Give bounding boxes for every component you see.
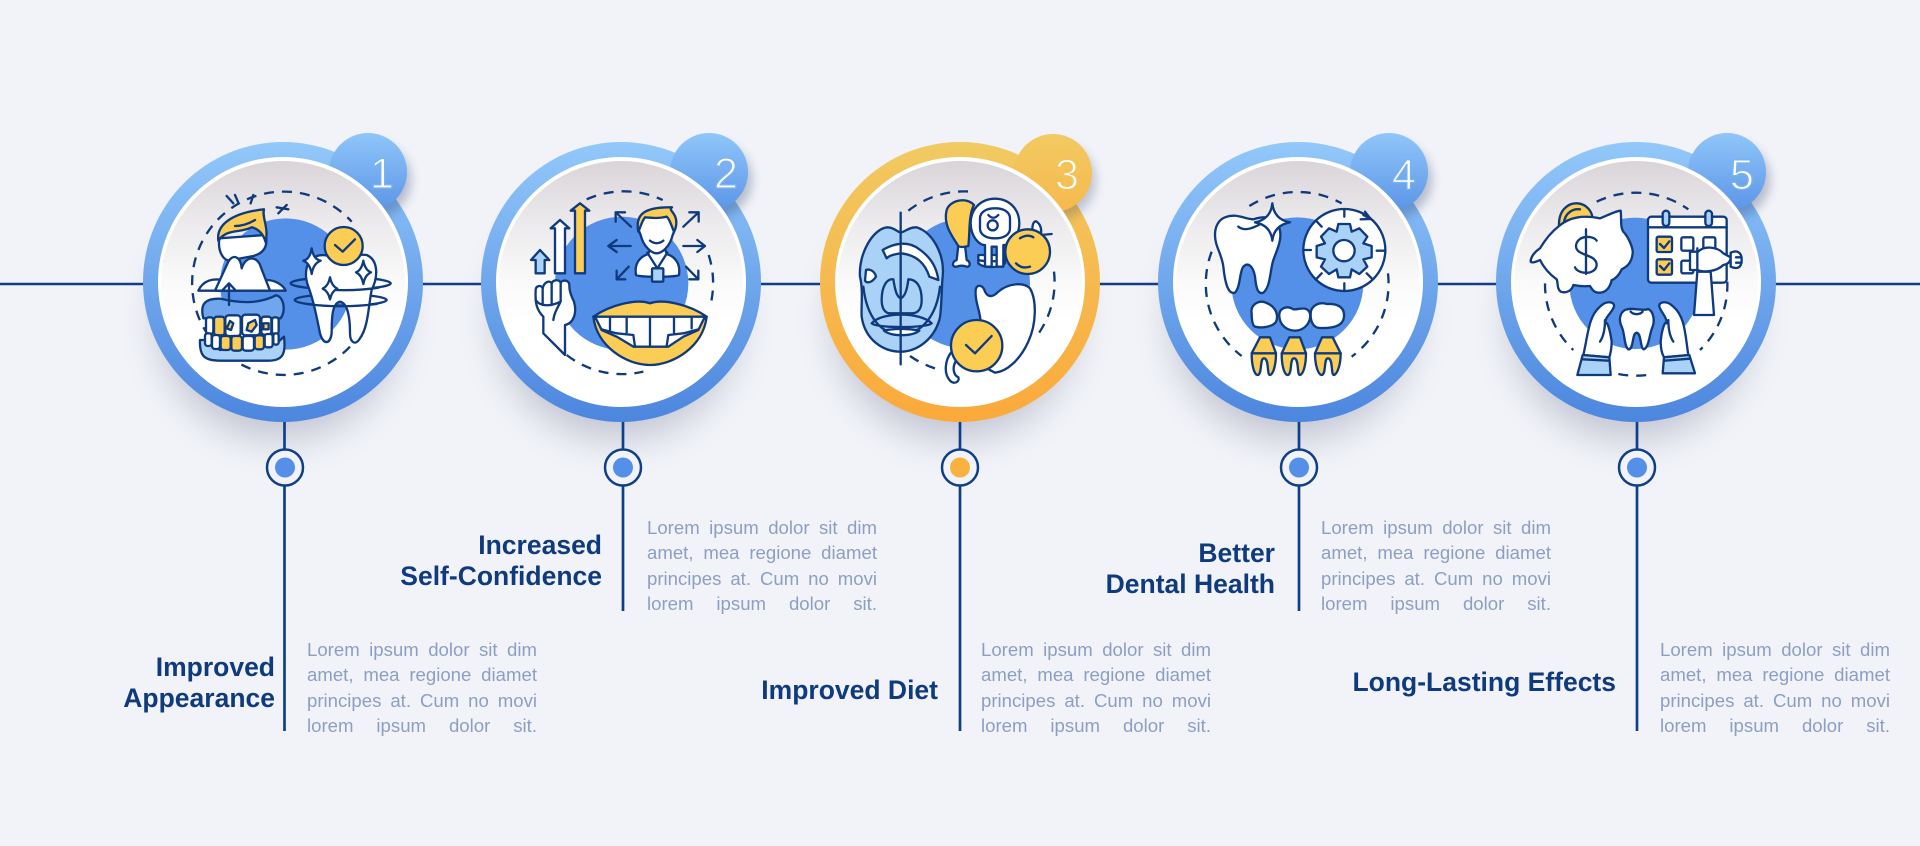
text block: step 3 description — [981, 639, 1211, 736]
panel: step 3 circle — [820, 134, 1100, 422]
heading: Better Dental Health — [1106, 538, 1275, 599]
text block: step 4 description: principes at. Cum no movi — [1321, 568, 1551, 589]
icon: long-term savings and care — [1531, 193, 1742, 376]
text block: step 1 description: principes at. Cum no movi — [307, 690, 537, 711]
step 1 connector and node — [157, 196, 401, 731]
number badge 1: 1 — [370, 150, 394, 198]
number badge 2: 2 — [714, 150, 738, 198]
text block: step 5 description: principes at. Cum no movi — [1660, 690, 1890, 711]
heading: Improved Appearance: Appearance — [123, 683, 275, 713]
text block: step 1 description — [307, 639, 537, 736]
step 2 connector and node — [495, 196, 739, 611]
heading: Increased Self-Confidence — [400, 530, 602, 591]
text block: step 2 description: principes at. Cum no movi — [647, 568, 877, 589]
heading: Better Dental Health: Better — [1198, 538, 1275, 568]
text block: step 4 description: lorem ipsum dolor sit. — [1321, 593, 1551, 614]
heading: Increased Self-Confidence: Increased — [478, 530, 602, 560]
panel: step 1 circle — [143, 133, 423, 422]
text block: step 4 description: Lorem ipsum dolor sit dim — [1321, 517, 1551, 538]
icon: oral anatomy and diet — [860, 191, 1055, 383]
heading: Improved Diet: Improved Diet — [761, 675, 938, 705]
number badge 5 — [1688, 133, 1766, 211]
text block: step 1 description: Lorem ipsum dolor sit dim — [307, 639, 537, 660]
text block: step 3 description: principes at. Cum no movi — [981, 690, 1211, 711]
text block: step 5 description — [1660, 639, 1890, 736]
number badge 3: 3 — [1055, 151, 1079, 199]
text block: step 4 description — [1321, 517, 1551, 614]
heading: Improved Appearance: Improved — [156, 652, 275, 682]
text block: step 2 description: Lorem ipsum dolor sit dim — [647, 517, 877, 538]
number badge 5: 5 — [1730, 151, 1754, 199]
heading: Long-Lasting Effects: Long-Lasting Effects — [1352, 667, 1616, 697]
number badge 1 — [329, 133, 407, 211]
heading: Increased Self-Confidence: Self-Confidence — [400, 561, 602, 591]
number badge 3 — [1014, 134, 1092, 212]
text block: step 3 description: lorem ipsum dolor sit. — [981, 715, 1211, 736]
step 3 connector and node — [833, 196, 1077, 731]
text block: step 1 description: lorem ipsum dolor sit. — [307, 715, 537, 736]
text block: step 5 description: lorem ipsum dolor sit. — [1660, 715, 1890, 736]
heading: Improved Appearance — [123, 652, 275, 713]
text block: step 4 description: amet, mea regione diamet — [1321, 542, 1551, 563]
text block: step 2 description: amet, mea regione diamet — [647, 542, 877, 563]
horizontal timeline line — [0, 283, 1920, 285]
step 4 connector and node — [1171, 196, 1415, 611]
text block: step 2 description — [647, 517, 877, 614]
text block: step 2 description: lorem ipsum dolor sit. — [647, 593, 877, 614]
panel: step 5 circle — [1496, 133, 1776, 422]
icon: teeth whitening and appearance — [192, 192, 391, 375]
number badge 4 — [1350, 133, 1428, 211]
text block: step 1 description: amet, mea regione diamet — [307, 664, 537, 685]
icon: dental health and crowns — [1206, 192, 1389, 375]
text block: step 3 description: amet, mea regione diamet — [981, 664, 1211, 685]
text block: step 5 description: amet, mea regione diamet — [1660, 664, 1890, 685]
panel: step 4 circle — [1158, 133, 1438, 422]
heading: Better Dental Health: Dental Health — [1106, 569, 1275, 599]
number badge 2 — [670, 133, 748, 211]
panel: step 2 circle — [481, 133, 761, 422]
text block: step 5 description: Lorem ipsum dolor sit dim — [1660, 639, 1890, 660]
icon: confidence and smile — [531, 191, 713, 374]
text block: step 3 description: Lorem ipsum dolor sit dim — [981, 639, 1211, 660]
number badge 4: 4 — [1392, 151, 1416, 199]
step 5 connector and node — [1509, 196, 1753, 731]
